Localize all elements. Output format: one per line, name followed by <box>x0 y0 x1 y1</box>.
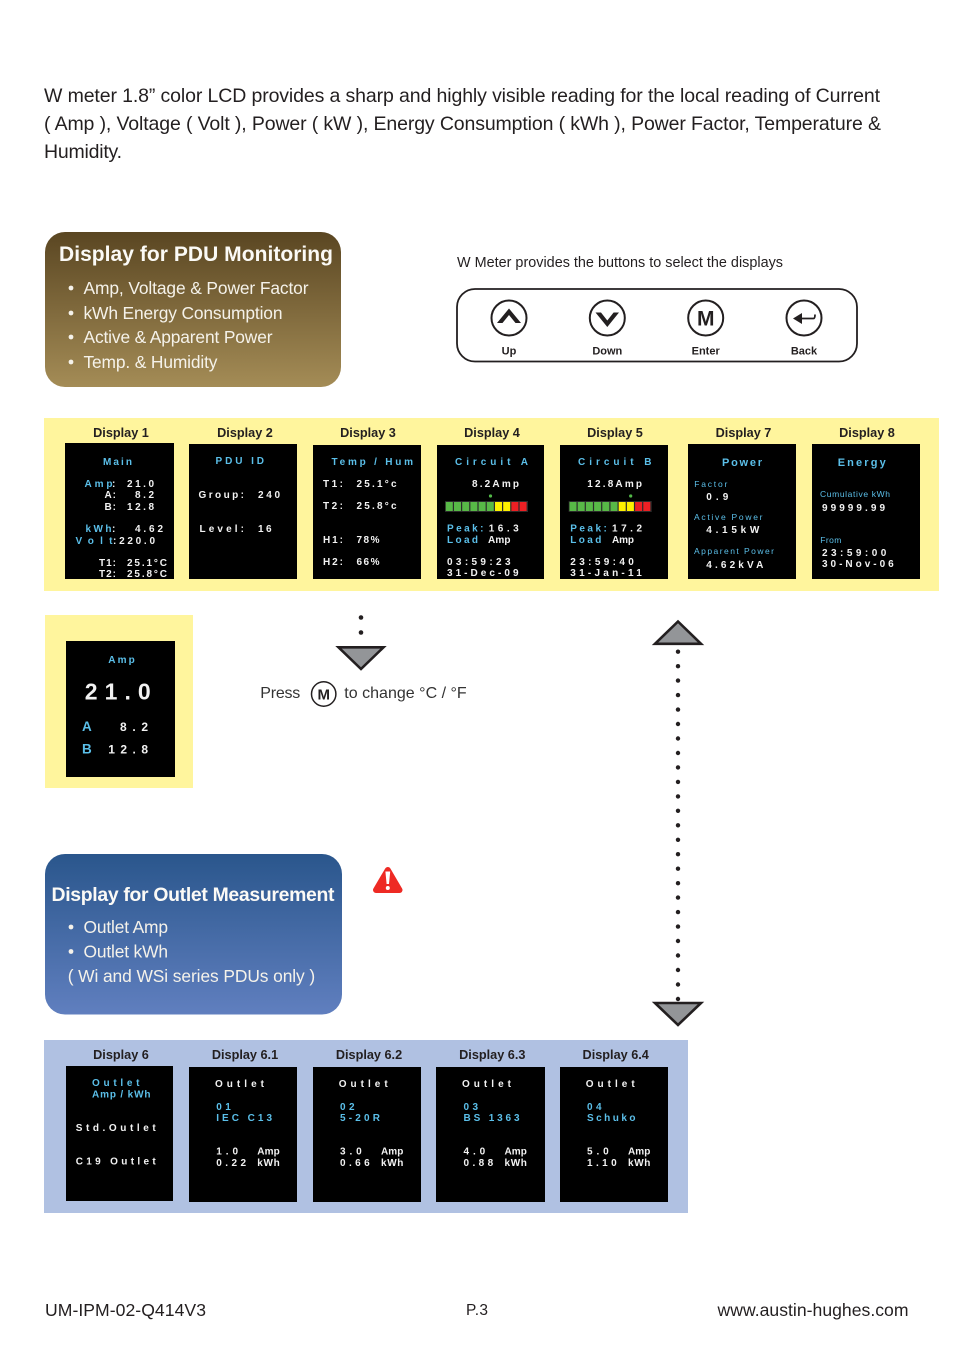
display 3: temp and humidity: H2: <box>323 557 343 568</box>
button caption: W Meter provides the buttons to select the displays <box>457 255 783 271</box>
display 3: temp and humidity: H1: <box>323 535 343 546</box>
display 6.3: outlet 03: BS 1363 <box>464 1113 520 1124</box>
display 6.1: outlet 01: 1.0 <box>216 1146 238 1158</box>
display 8: energy <box>812 426 920 579</box>
panel: display for outlet measurement <box>45 854 342 1014</box>
display 3: temp and humidity: 66% <box>356 557 380 568</box>
display 1: main: 25.8°C <box>127 569 167 580</box>
display 7: power: Active Power <box>694 512 763 522</box>
icon: up button: Up <box>502 346 517 358</box>
panel: display for PDU monitoring: Amp, Voltage & Power Factor <box>84 278 309 298</box>
display 6.1: outlet 01: kWh <box>257 1158 280 1169</box>
arrow: dotted double-headed connector <box>655 622 701 1025</box>
display 5: circuit B: Display 5 <box>587 426 643 440</box>
footer: P.3 <box>466 1302 488 1319</box>
display 5: circuit B: Amp <box>612 535 634 546</box>
display 6.4: outlet 04: Amp <box>628 1146 650 1158</box>
panel: display for PDU monitoring: Active & Apparent Power <box>84 327 273 347</box>
icon: enter button <box>688 300 723 358</box>
display 6.3: outlet 03: Amp <box>504 1146 527 1158</box>
display 6.4: outlet 04: 1.10 <box>587 1158 617 1169</box>
intro paragraph: ( Amp ), Voltage ( Volt ), Power ( kW ), Energy Consumption ( kWh ), Power Factor, Temperature & <box>44 113 881 135</box>
display 6.1: outlet 01: Amp <box>257 1146 280 1158</box>
load bar: circuit A <box>445 501 528 512</box>
display 7: power <box>688 426 796 579</box>
display 1: main: B: <box>104 502 116 513</box>
panel: display for outlet measurement: ( Wi and WSi series PDUs only ) <box>68 966 315 986</box>
icon: back button <box>786 300 822 358</box>
display 6: outlet menu: C19 Outlet <box>76 1156 156 1168</box>
display 3: temp and humidity: Display 3 <box>340 426 396 440</box>
display 1: main: 12.8 <box>127 502 154 513</box>
display 1: main: T1: <box>99 558 116 569</box>
note: press M to change units: to change °C / °F <box>344 685 467 702</box>
panel: display for PDU monitoring: Temp. & Humidity <box>84 352 218 372</box>
panel: display for outlet measurement: Outlet Amp <box>84 917 168 937</box>
display 8: energy: 99999.99 <box>822 503 885 514</box>
display 6.1: outlet 01: 0.22 <box>216 1158 246 1169</box>
display 5: circuit B <box>560 426 668 579</box>
display 6.2: outlet 02 <box>313 1048 421 1202</box>
display 6.4: outlet 04: 04 <box>587 1102 602 1113</box>
display 7: power: 4.62kVA <box>706 560 763 571</box>
display 3: temp and humidity: T1: <box>323 479 343 490</box>
display 1: main: Main <box>103 457 132 468</box>
display 8: energy: From <box>820 535 841 545</box>
display 6.3: outlet 03: Display 6.3 <box>459 1048 525 1062</box>
display 4: circuit A: 8.2Amp <box>472 479 519 490</box>
display 6.3: outlet 03: 03 <box>464 1102 478 1113</box>
panel: display for PDU monitoring: kWh Energy Consumption <box>84 303 282 323</box>
intro paragraph: W meter 1.8” color LCD provides a sharp and highly visible reading for the local reading of Current <box>44 85 881 107</box>
display 1: main: kWh <box>86 524 112 535</box>
display 6.4: outlet 04: Schuko <box>587 1113 636 1124</box>
display 6.2: outlet 02: 02 <box>340 1102 355 1113</box>
panel: blue outlet display strip <box>44 1040 688 1213</box>
display 7: power: Factor <box>694 479 727 489</box>
display 6.4: outlet 04: Outlet <box>586 1079 635 1090</box>
display 6.3: outlet 03: Outlet <box>462 1079 512 1090</box>
intro paragraph <box>44 85 881 163</box>
note: press M to change units: Press <box>260 685 300 702</box>
arrow: down to amp display <box>338 615 384 669</box>
display 7: power: Power <box>722 457 763 469</box>
display 5: circuit B: 23:59:40 <box>570 557 634 568</box>
panel: display for PDU monitoring <box>45 232 341 387</box>
display 6.4: outlet 04: Display 6.4 <box>583 1048 649 1062</box>
footer: UM-IPM-02-Q414V3 <box>45 1300 206 1320</box>
panel: amp display: Amp <box>108 655 135 666</box>
display 2: PDU ID: 16 <box>258 524 272 535</box>
display 5: circuit B: Circuit B <box>578 457 652 468</box>
display 4: circuit A: 16.3 <box>489 524 519 534</box>
display 6: outlet menu: Outlet <box>92 1078 140 1089</box>
display 6.1: outlet 01: Outlet <box>215 1079 265 1090</box>
display 5: circuit B: 17.2 <box>612 524 642 534</box>
display 1: main: Amp <box>84 479 112 490</box>
display 6.1: outlet 01: Display 6.1 <box>212 1048 278 1062</box>
panel: amp display: 12.8 <box>108 742 148 756</box>
display 4: circuit A: Peak: <box>447 524 484 534</box>
display 4: circuit A: Circuit A <box>455 457 528 468</box>
display 4: circuit A: Amp <box>488 535 510 546</box>
display 1: main: 4.62 <box>135 524 163 535</box>
display 6.1: outlet 01 <box>189 1048 297 1202</box>
display 3: temp and humidity: 25.8°c <box>356 501 397 512</box>
display 2: PDU ID <box>189 426 297 579</box>
display 6.1: outlet 01: IEC C13 <box>216 1113 272 1124</box>
footer: www.austin-hughes.com <box>716 1300 908 1320</box>
icon: back button: Back <box>791 346 818 358</box>
display 1: main: : <box>112 479 115 490</box>
display 2: PDU ID: Group: <box>198 490 244 501</box>
display 6.3: outlet 03 <box>436 1048 545 1202</box>
display 8: energy: Cumulative kWh <box>820 489 890 499</box>
display 6.4: outlet 04: 5.0 <box>587 1146 609 1158</box>
panel: amp display: 8.2 <box>120 720 148 734</box>
footer <box>45 1300 908 1320</box>
display 6.2: outlet 02: 3.0 <box>340 1146 362 1158</box>
icon: enter button: M <box>697 308 714 330</box>
display 4: circuit A: Load <box>447 535 478 546</box>
display 8: energy: 23:59:00 <box>822 548 887 559</box>
display 4: circuit A: 31-Dec-09 <box>447 568 519 579</box>
icon: down button: Down <box>592 346 623 358</box>
display 7: power: 4.15kW <box>706 525 760 536</box>
display 6: outlet menu: Amp / kWh <box>92 1090 150 1100</box>
display 6.4: outlet 04 <box>560 1048 668 1202</box>
icon: enter button: Enter <box>692 346 720 358</box>
display 1: main: 21.0 <box>127 479 154 490</box>
display 6.4: outlet 04: kWh <box>628 1158 650 1169</box>
panel: yellow PDU display strip <box>44 418 939 591</box>
display 2: PDU ID: PDU ID <box>216 456 264 467</box>
note: press M to change units <box>260 682 467 706</box>
display 6: outlet menu <box>66 1048 173 1201</box>
display 4: circuit A: 03:59:23 <box>447 557 511 568</box>
display 7: power: Display 7 <box>716 426 771 440</box>
display 3: temp and humidity <box>313 426 421 579</box>
display 7: power: 0.9 <box>706 492 729 503</box>
display 6.2: outlet 02: 0.66 <box>340 1158 370 1169</box>
display 4: circuit A: Display 4 <box>464 426 520 440</box>
display 6.2: outlet 02: Outlet <box>339 1079 388 1090</box>
display 1: main: Display 1 <box>93 426 149 440</box>
display 6.3: outlet 03: 4.0 <box>464 1146 486 1158</box>
display 6: outlet menu: Std.Outlet <box>76 1123 156 1134</box>
panel: display for outlet measurement: Outlet kWh <box>84 942 168 962</box>
display 4: circuit A <box>437 426 544 579</box>
display 6.1: outlet 01: 01 <box>216 1102 231 1113</box>
display 8: energy: Display 8 <box>839 426 895 440</box>
display 6.3: outlet 03: 0.88 <box>464 1158 494 1169</box>
display 2: PDU ID: Display 2 <box>217 426 273 440</box>
panel: display for outlet measurement: Display for Outlet Measurement <box>52 884 335 906</box>
panel: amp display: 21.0 <box>85 678 151 704</box>
display 6.2: outlet 02: kWh <box>381 1158 403 1169</box>
display 6.2: outlet 02: Amp <box>381 1146 403 1158</box>
display 1: main: :220.0 <box>113 536 155 547</box>
panel: amp display: A <box>82 719 92 734</box>
icon: warning triangle <box>376 870 400 890</box>
display 6.2: outlet 02: Display 6.2 <box>336 1048 402 1062</box>
display 3: temp and humidity: 78% <box>356 535 380 546</box>
panel: amp display: B <box>82 741 92 756</box>
display 5: circuit B: Load <box>570 535 601 546</box>
note: press M to change units: M <box>317 686 330 704</box>
display 3: temp and humidity: T2: <box>323 501 343 512</box>
icon: up button <box>492 300 526 358</box>
panel: amp display <box>45 615 193 788</box>
display 1: main: : <box>112 524 115 535</box>
display 7: power: Apparent Power <box>694 546 774 556</box>
display 5: circuit B: Peak: <box>570 524 607 534</box>
panel: display for PDU monitoring: Display for PDU Monitoring <box>59 243 333 266</box>
display 2: PDU ID: 240 <box>258 490 280 501</box>
display 5: circuit B: 31-Jan-11 <box>570 568 642 579</box>
display 6.2: outlet 02: 5-20R <box>340 1113 381 1124</box>
display 1: main <box>65 426 174 580</box>
display 2: PDU ID: Level: <box>200 524 244 535</box>
display 1: main: A: <box>104 490 116 501</box>
display 1: main: 25.1°C <box>127 558 167 569</box>
display 6.3: outlet 03: kWh <box>504 1158 527 1169</box>
display 3: temp and humidity: Temp / Hum <box>332 457 413 468</box>
display 1: main: Volt <box>76 536 113 547</box>
display 8: energy: 30-Nov-06 <box>822 559 894 570</box>
display 3: temp and humidity: 25.1°c <box>356 479 397 490</box>
display 6: outlet menu: Display 6 <box>93 1048 149 1062</box>
panel: meter buttons <box>457 289 857 362</box>
icon: down button <box>590 300 625 358</box>
load bar: circuit B <box>569 501 652 512</box>
display 5: circuit B: 12.8Amp <box>587 479 642 490</box>
display 8: energy: Energy <box>838 457 887 469</box>
display 1: main: T2: <box>99 569 116 580</box>
intro paragraph: Humidity. <box>44 141 122 163</box>
display 1: main: 8.2 <box>135 490 154 501</box>
